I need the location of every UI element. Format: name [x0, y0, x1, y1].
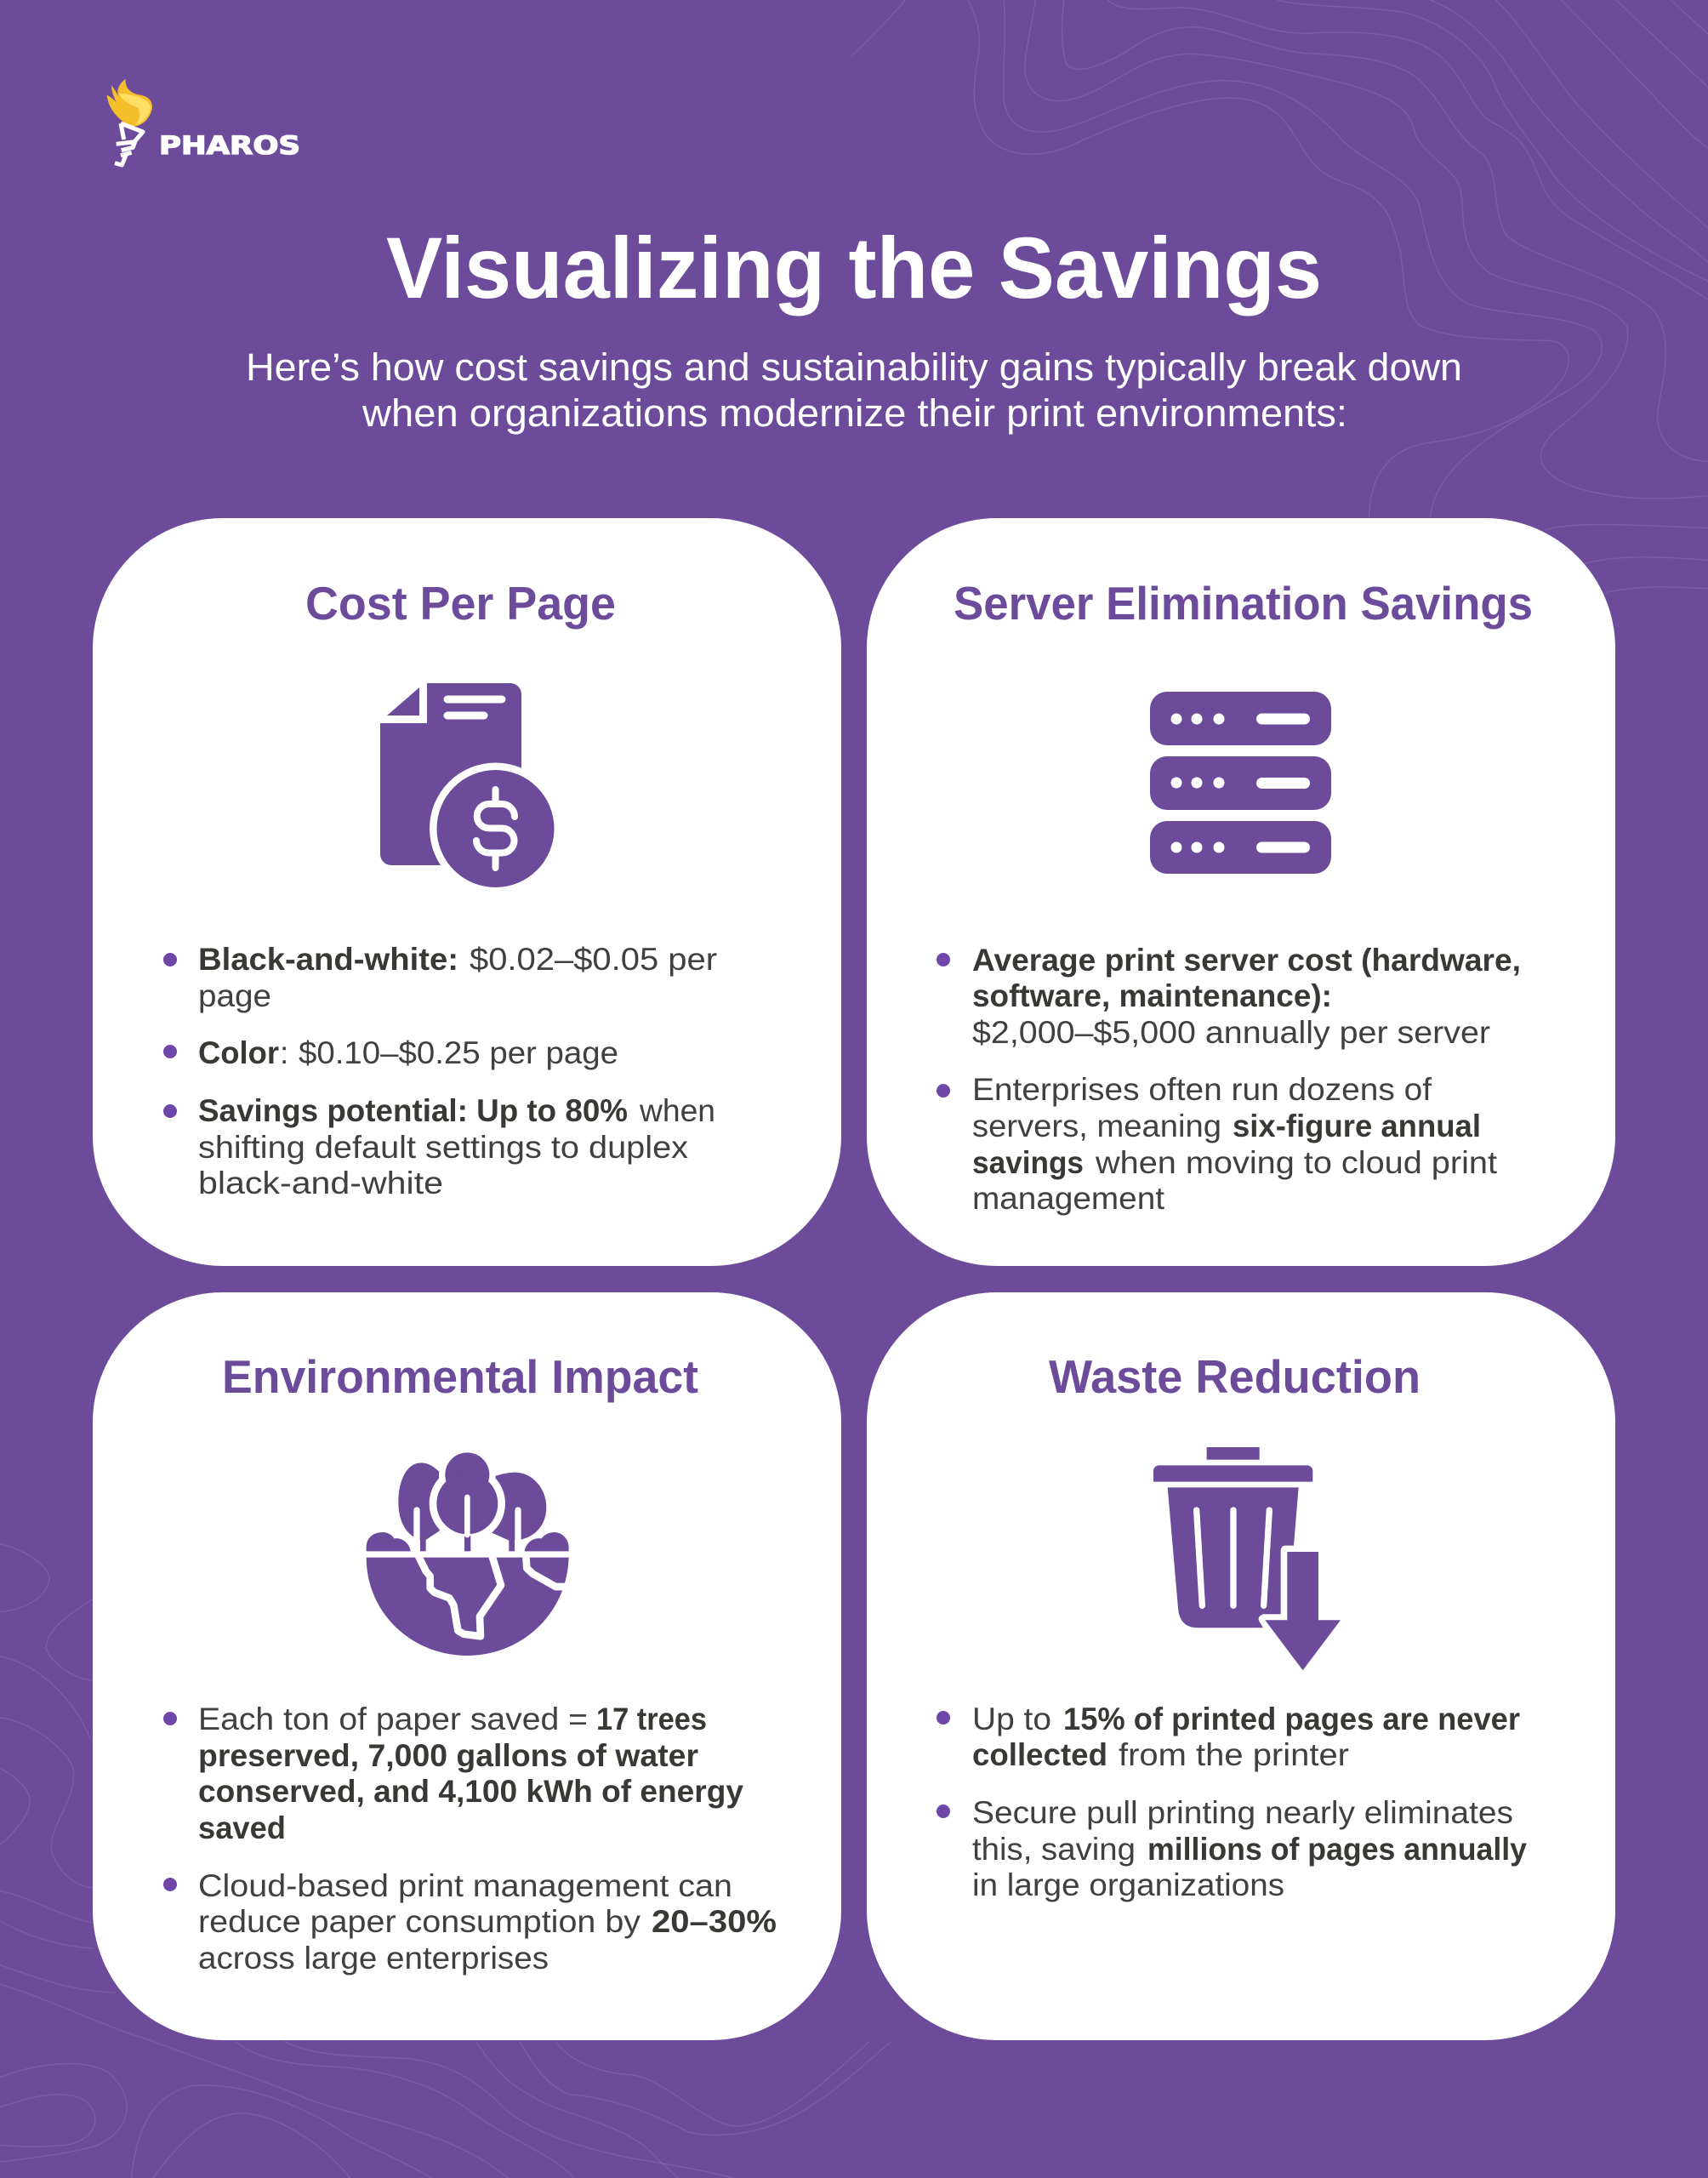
icon: server stack [1150, 692, 1331, 874]
bullet list: server savings: six-figure annual [1233, 1109, 1481, 1143]
bullet list: waste reduction: collected [972, 1737, 1107, 1772]
bullet list: waste reduction: Secure pull printing nearly eliminates [972, 1795, 1513, 1830]
bullet list: environmental impact: saved [198, 1810, 286, 1845]
bullet list: waste reduction: this, saving [972, 1832, 1136, 1867]
bullet list: cost per page: $0.10–$0.25 per page [299, 1035, 618, 1070]
bullet list: waste reduction: millions of pages annually [1147, 1832, 1527, 1867]
bullet list: server savings: when moving to cloud print [1095, 1145, 1498, 1180]
icon: globe with trees [367, 1452, 569, 1656]
panel: environmental impact [93, 1292, 841, 2040]
logo: Pharos torch and wordmark [107, 79, 300, 165]
subtitle [246, 345, 1462, 435]
bullet list: server savings: $2,000–$5,000 annually per server [972, 1015, 1490, 1050]
logo: Pharos torch and wordmark: PHAROS [159, 131, 300, 160]
bullet list: environmental impact: 17 trees [596, 1702, 707, 1736]
bullet list: cost per page [163, 942, 717, 1200]
panel: server elimination savings [867, 518, 1615, 1266]
bullet list: server savings: savings [972, 1145, 1084, 1180]
title: Visualizing the Savings [386, 220, 1322, 316]
bullet list: waste reduction: 15% of printed pages are never [1063, 1702, 1520, 1736]
bullet list: cost per page: : [280, 1035, 288, 1070]
bullet list: cost per page: $0.02–$0.05 per [470, 942, 717, 977]
heading: cost per page: Cost Per Page [305, 577, 616, 630]
bullet list: server savings: Average print server cost (hardware, [972, 943, 1521, 978]
bullet list: waste reduction: in large organizations [972, 1867, 1284, 1902]
bullet list: cost per page: black-and-white [198, 1166, 443, 1200]
bullet list: environmental impact: Each ton of paper saved = [198, 1702, 588, 1736]
bullet list: cost per page: Color [198, 1035, 279, 1070]
icon: trash can with down arrow [1153, 1447, 1341, 1670]
heading: server elimination savings: Server Elimination Savings [954, 577, 1533, 630]
bullet list: environmental impact: conserved, and 4,100 kWh of energy [198, 1774, 743, 1809]
heading: waste reduction: Waste Reduction [1049, 1350, 1420, 1403]
bullet list: cost per page: Black-and-white: [198, 942, 458, 977]
bullet list: cost per page: when [639, 1093, 715, 1128]
bullet list: environmental impact: reduce paper consumption by [198, 1904, 641, 1939]
bullet list: waste reduction: Up to [972, 1702, 1051, 1736]
bullet list: waste reduction: from the printer [1119, 1737, 1349, 1772]
subtitle: when organizations modernize their print environments: [362, 391, 1347, 435]
bullet list: cost per page: Savings potential: Up to 80% [198, 1093, 628, 1128]
bullet list: environmental impact: preserved, 7,000 gallons of water [198, 1738, 698, 1773]
bullet list: cost per page: page [198, 978, 271, 1013]
icon: torch flame [107, 79, 152, 165]
icon: document with dollar coin [380, 683, 561, 895]
bullet list: environmental impact: Cloud-based print management can [198, 1868, 732, 1903]
bullet list: environmental impact: 20–30% [652, 1904, 777, 1939]
bullet list: server savings: Enterprises often run dozens of [972, 1072, 1432, 1107]
panel: waste reduction [867, 1292, 1615, 2040]
bullet list: waste reduction [937, 1702, 1527, 1902]
subtitle: Here’s how cost savings and sustainability gains typically break down [246, 345, 1462, 389]
bullet list: server savings [937, 943, 1521, 1216]
heading: environmental impact: Environmental Impact [222, 1350, 698, 1403]
bullet list: server savings: servers, meaning [972, 1109, 1221, 1143]
bullet list: cost per page: shifting default settings to duplex [198, 1130, 689, 1165]
bullet list: server savings: management [972, 1181, 1165, 1216]
bullet list: environmental impact [163, 1702, 777, 1976]
bullet list: server savings: software, maintenance): [972, 978, 1332, 1013]
panel: cost per page [93, 518, 841, 1266]
bullet list: environmental impact: across large enterprises [198, 1941, 549, 1976]
